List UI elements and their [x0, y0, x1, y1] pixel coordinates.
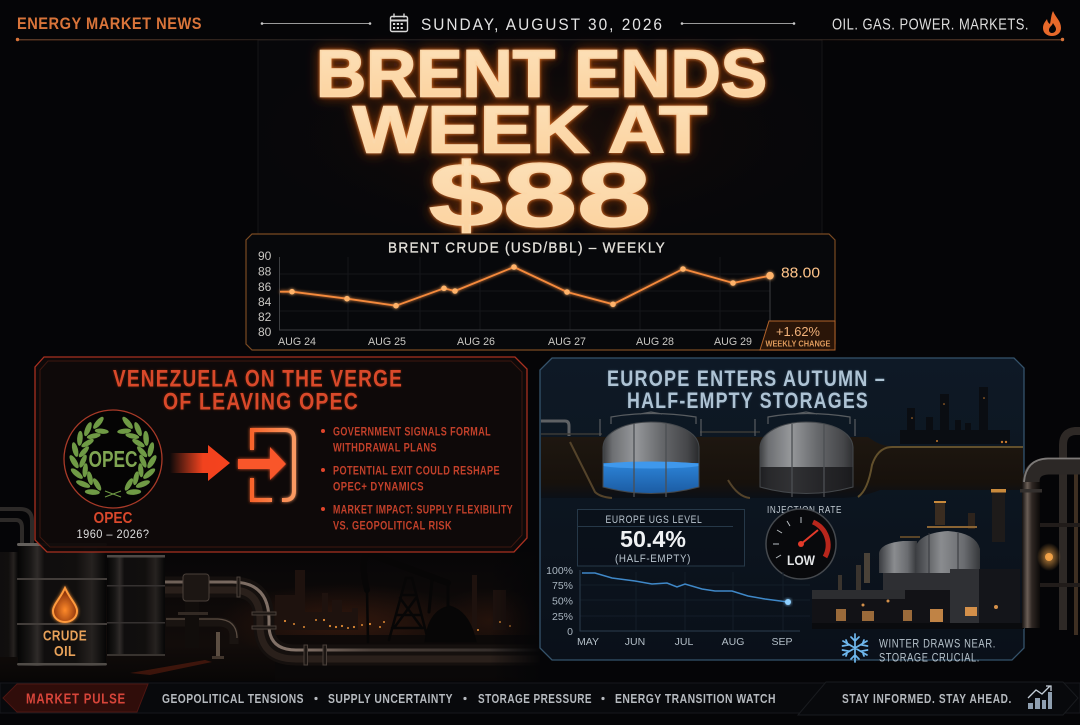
chart axes: [280, 257, 770, 330]
x axis labels: AUG 29: [714, 336, 752, 348]
UGS level box: EUROPE UGS LEVEL: [606, 514, 702, 526]
panel: Brent chart: [246, 234, 835, 350]
market pulse tag: [3, 684, 148, 712]
chart title: BRENT CRUDE (USD/BBL) – WEEKLY: [388, 240, 666, 256]
refinery stacks: [934, 489, 1006, 542]
x axis labels: AUG 27: [548, 336, 586, 348]
UGS level box: (HALF-EMPTY): [615, 553, 691, 565]
icon: oil drop: [53, 588, 77, 622]
panel heading: VENEZUELA ON THE VERGE: [113, 366, 403, 392]
x axis labels: AUG 24: [278, 336, 316, 348]
header bar: [16, 11, 1064, 41]
header: left rule: [261, 22, 371, 25]
pump jack: [364, 553, 476, 642]
OPEC emblem: OPEC: [88, 446, 138, 472]
bullet list: OPEC+ DYNAMICS: [333, 482, 424, 494]
headline: WEEK AT: [353, 92, 707, 168]
refinery buildings: [812, 569, 1020, 623]
refinery front tank: [915, 531, 980, 578]
rear barrel: [107, 555, 165, 656]
market pulse tag: MARKET PULSE: [26, 692, 126, 708]
injection rate gauge: LOW: [787, 552, 816, 568]
storage y labels: 100%: [546, 565, 573, 577]
storage chart grid: [580, 572, 810, 631]
price line: [280, 264, 774, 309]
distant refinery skyline: [900, 387, 1010, 444]
header: tagline: OIL. GAS. POWER. MARKETS.: [832, 16, 1029, 34]
panel: Venezuela OPEC: [35, 357, 527, 552]
headline: [316, 36, 767, 246]
storage x labels: AUG: [722, 636, 744, 648]
surface deck lines: [541, 432, 760, 434]
x axis labels: AUG 28: [636, 336, 674, 348]
sign-off: STAY INFORMED. STAY AHEAD.: [842, 691, 1012, 706]
icon: flame: [1043, 11, 1061, 36]
icon: growth chart: [1028, 686, 1052, 709]
OPEC caption: 1960 – 2026?: [76, 527, 150, 541]
storage y labels: 50%: [552, 596, 573, 608]
tank empty: [755, 412, 859, 503]
headline: $88: [429, 146, 651, 246]
secondary pipework: [166, 598, 237, 659]
bullet list: GOVERNMENT SIGNALS FORMAL: [333, 426, 491, 438]
soil edges: [570, 442, 1023, 498]
footer bar: [0, 682, 1080, 715]
panel: Europe storage: [540, 358, 1024, 664]
y axis labels: 90: [258, 249, 272, 263]
storage y labels: 75%: [552, 580, 573, 592]
y axis labels: 80: [258, 325, 272, 339]
panel heading: HALF-EMPTY STORAGES: [627, 388, 869, 413]
panel heading: EUROPE ENTERS AUTUMN –: [607, 366, 886, 391]
barrel label: CRUDE: [43, 628, 87, 644]
scene fade: [490, 552, 542, 681]
y axis labels: 82: [258, 310, 272, 324]
tank half full: [600, 412, 703, 503]
header: underline: [16, 38, 1064, 41]
ticker text: SUPPLY UNCERTAINTY: [328, 691, 453, 706]
weekly change tag: +1.62%: [776, 324, 820, 339]
main barrel: [17, 543, 107, 666]
ticker text: STORAGE PRESSURE: [478, 691, 592, 706]
icon: calendar: [390, 14, 408, 32]
left barrel: [0, 552, 18, 657]
left lower scene: skyline, pump jack, pipes, barrels: [0, 509, 550, 681]
bullet list: POTENTIAL EXIT COULD RESHAPE: [333, 466, 500, 478]
title backdrop frame: [210, 10, 870, 260]
ticker text: ENERGY TRANSITION WATCH: [615, 691, 776, 706]
storage x labels: JUL: [675, 636, 693, 648]
x axis labels: [278, 336, 752, 348]
injection rate gauge: INJECTION RATE: [767, 504, 842, 516]
header: brand: ENERGY MARKET NEWS: [17, 14, 202, 33]
storage x labels: SEP: [771, 636, 793, 648]
storage y labels: [546, 565, 573, 638]
barrel label: [43, 628, 87, 660]
latest value: 88.00: [781, 264, 820, 282]
skyline: [275, 570, 506, 630]
refinery back tank: [879, 541, 917, 573]
latest storage point: [785, 599, 791, 605]
storage x labels: MAY: [577, 636, 599, 648]
storage axes: [580, 570, 800, 631]
header: right rule: [681, 22, 795, 25]
city haze: [215, 584, 475, 660]
main pipe: [164, 582, 540, 659]
right-side pipes: [1020, 431, 1080, 635]
weekly change tag: WEEKLY CHANGE: [766, 338, 831, 348]
winter note: [879, 636, 996, 664]
storage line chart: [546, 565, 810, 648]
OPEC caption: [76, 510, 150, 541]
panel heading: [113, 366, 403, 416]
bullet list: MARKET IMPACT: SUPPLY FLEXIBILITY: [333, 504, 513, 516]
storage line: [582, 573, 788, 602]
refinery lit windows: [836, 600, 998, 622]
y axis labels: 84: [258, 295, 272, 309]
arrow: [170, 445, 230, 481]
injection rate gauge: [766, 504, 842, 579]
y axis labels: 88: [258, 264, 272, 278]
pipe flanges and valve: [183, 574, 326, 665]
ground band: [275, 635, 540, 681]
ticker text: [162, 691, 776, 706]
OPEC emblem: [64, 410, 162, 508]
pipe stub: [541, 421, 569, 436]
storage y labels: 25%: [552, 611, 573, 623]
header: date: SUNDAY, AUGUST 30, 2026: [421, 15, 664, 34]
right chevron frame: [798, 682, 1078, 715]
icon: snowflake: [842, 634, 868, 662]
chart grid: [279, 257, 770, 330]
x axis labels: AUG 26: [457, 336, 495, 348]
skyline lights: [284, 619, 511, 631]
storage x labels: [577, 636, 793, 648]
ground streak: [130, 660, 212, 675]
y axis labels: 86: [258, 280, 272, 294]
barrel label: OIL: [54, 643, 76, 660]
bullet list: [321, 426, 513, 532]
refinery foreground: [812, 489, 1024, 629]
storage x labels: JUN: [625, 636, 645, 648]
weekly change tag: [760, 321, 835, 350]
ticker text: GEOPOLITICAL TENSIONS: [162, 691, 304, 706]
x axis labels: AUG 25: [368, 336, 406, 348]
refinery base: [812, 623, 1024, 629]
storage y labels: 0: [567, 626, 573, 638]
winter note: WINTER DRAWS NEAR.: [879, 636, 996, 650]
panel heading: [607, 366, 886, 413]
y axis labels: [258, 249, 272, 339]
UGS level box: [578, 510, 744, 566]
bullet list: WITHDRAWAL PLANS: [333, 442, 437, 454]
icon: exit door: [238, 430, 294, 500]
UGS level box: 50.4%: [620, 526, 686, 552]
refinery details: [838, 526, 977, 591]
winter note: STORAGE CRUCIAL.: [879, 650, 980, 664]
headline: BRENT ENDS: [316, 36, 767, 112]
OPEC caption: OPEC: [94, 510, 132, 527]
bullet list: VS. GEOPOLITICAL RISK: [333, 520, 452, 532]
panel heading: OF LEAVING OPEC: [163, 388, 359, 416]
city haze right: [430, 588, 550, 652]
underground section: [541, 437, 1023, 498]
upper left pipe: [0, 509, 32, 546]
